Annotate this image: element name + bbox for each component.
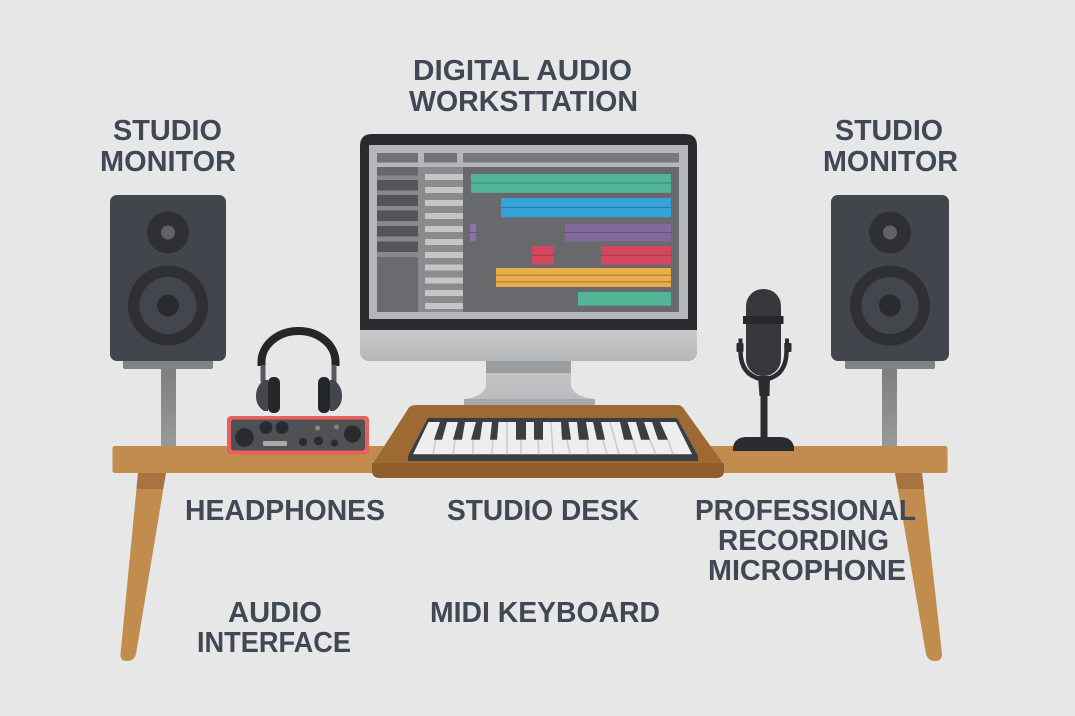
- microphone: [733, 289, 794, 451]
- black keys: [434, 422, 668, 440]
- mic body: [746, 289, 781, 376]
- label: professional recording microphone: [695, 495, 916, 587]
- label: studio monitor right: STUDIO: [835, 115, 943, 147]
- monitor stand: [464, 361, 595, 405]
- label: studio desk: STUDIO DESK: [447, 495, 639, 527]
- desk top: [112, 446, 948, 473]
- mic clips: [736, 343, 744, 352]
- mic base and stem: [733, 437, 794, 451]
- speaker: left studio monitor: [110, 195, 226, 448]
- label: audio interface: INTERFACE: [197, 627, 351, 659]
- midi keyboard: [372, 405, 724, 478]
- label: studio monitor right: MONITOR: [823, 146, 958, 178]
- track list column: [377, 167, 418, 312]
- label: professional recording microphone: PROFESSIONAL: [695, 495, 916, 527]
- label: studio monitor left: MONITOR: [100, 146, 236, 178]
- label: studio monitor left: [100, 115, 236, 178]
- title: digital audio workstation: [409, 55, 638, 118]
- label: professional recording microphone: MICROPHONE: [708, 555, 906, 587]
- white keys: [413, 422, 692, 454]
- mixer strip column: [418, 167, 463, 312]
- label: studio monitor left: STUDIO: [113, 115, 222, 147]
- audio clips: [470, 174, 671, 306]
- mic cradle: [740, 343, 786, 379]
- label: audio interface: AUDIO: [228, 597, 322, 629]
- title: digital audio workstation: DIGITAL AUDIO: [413, 55, 632, 87]
- desk leg right: [895, 473, 942, 661]
- label: midi keyboard: MIDI KEYBOARD: [430, 597, 660, 629]
- desk leg left: [120, 473, 166, 661]
- label: professional recording microphone: RECORDING: [718, 525, 889, 557]
- speaker: right studio monitor: [831, 195, 949, 448]
- label: headphones: HEADPHONES: [185, 495, 385, 527]
- desk: studio desk: [112, 446, 948, 661]
- title: digital audio workstation: WORKSTTATION: [409, 86, 638, 118]
- headphones icon: [256, 331, 342, 413]
- audio interface: [227, 416, 369, 454]
- label: audio interface: [197, 597, 351, 659]
- keyboard tray: [372, 405, 724, 478]
- screen: daw arrangement: [369, 145, 688, 319]
- monitor body: [360, 134, 697, 361]
- label: studio monitor right: [823, 115, 958, 178]
- monitor: daw computer display: [360, 134, 697, 405]
- keyboard frame: [408, 418, 698, 461]
